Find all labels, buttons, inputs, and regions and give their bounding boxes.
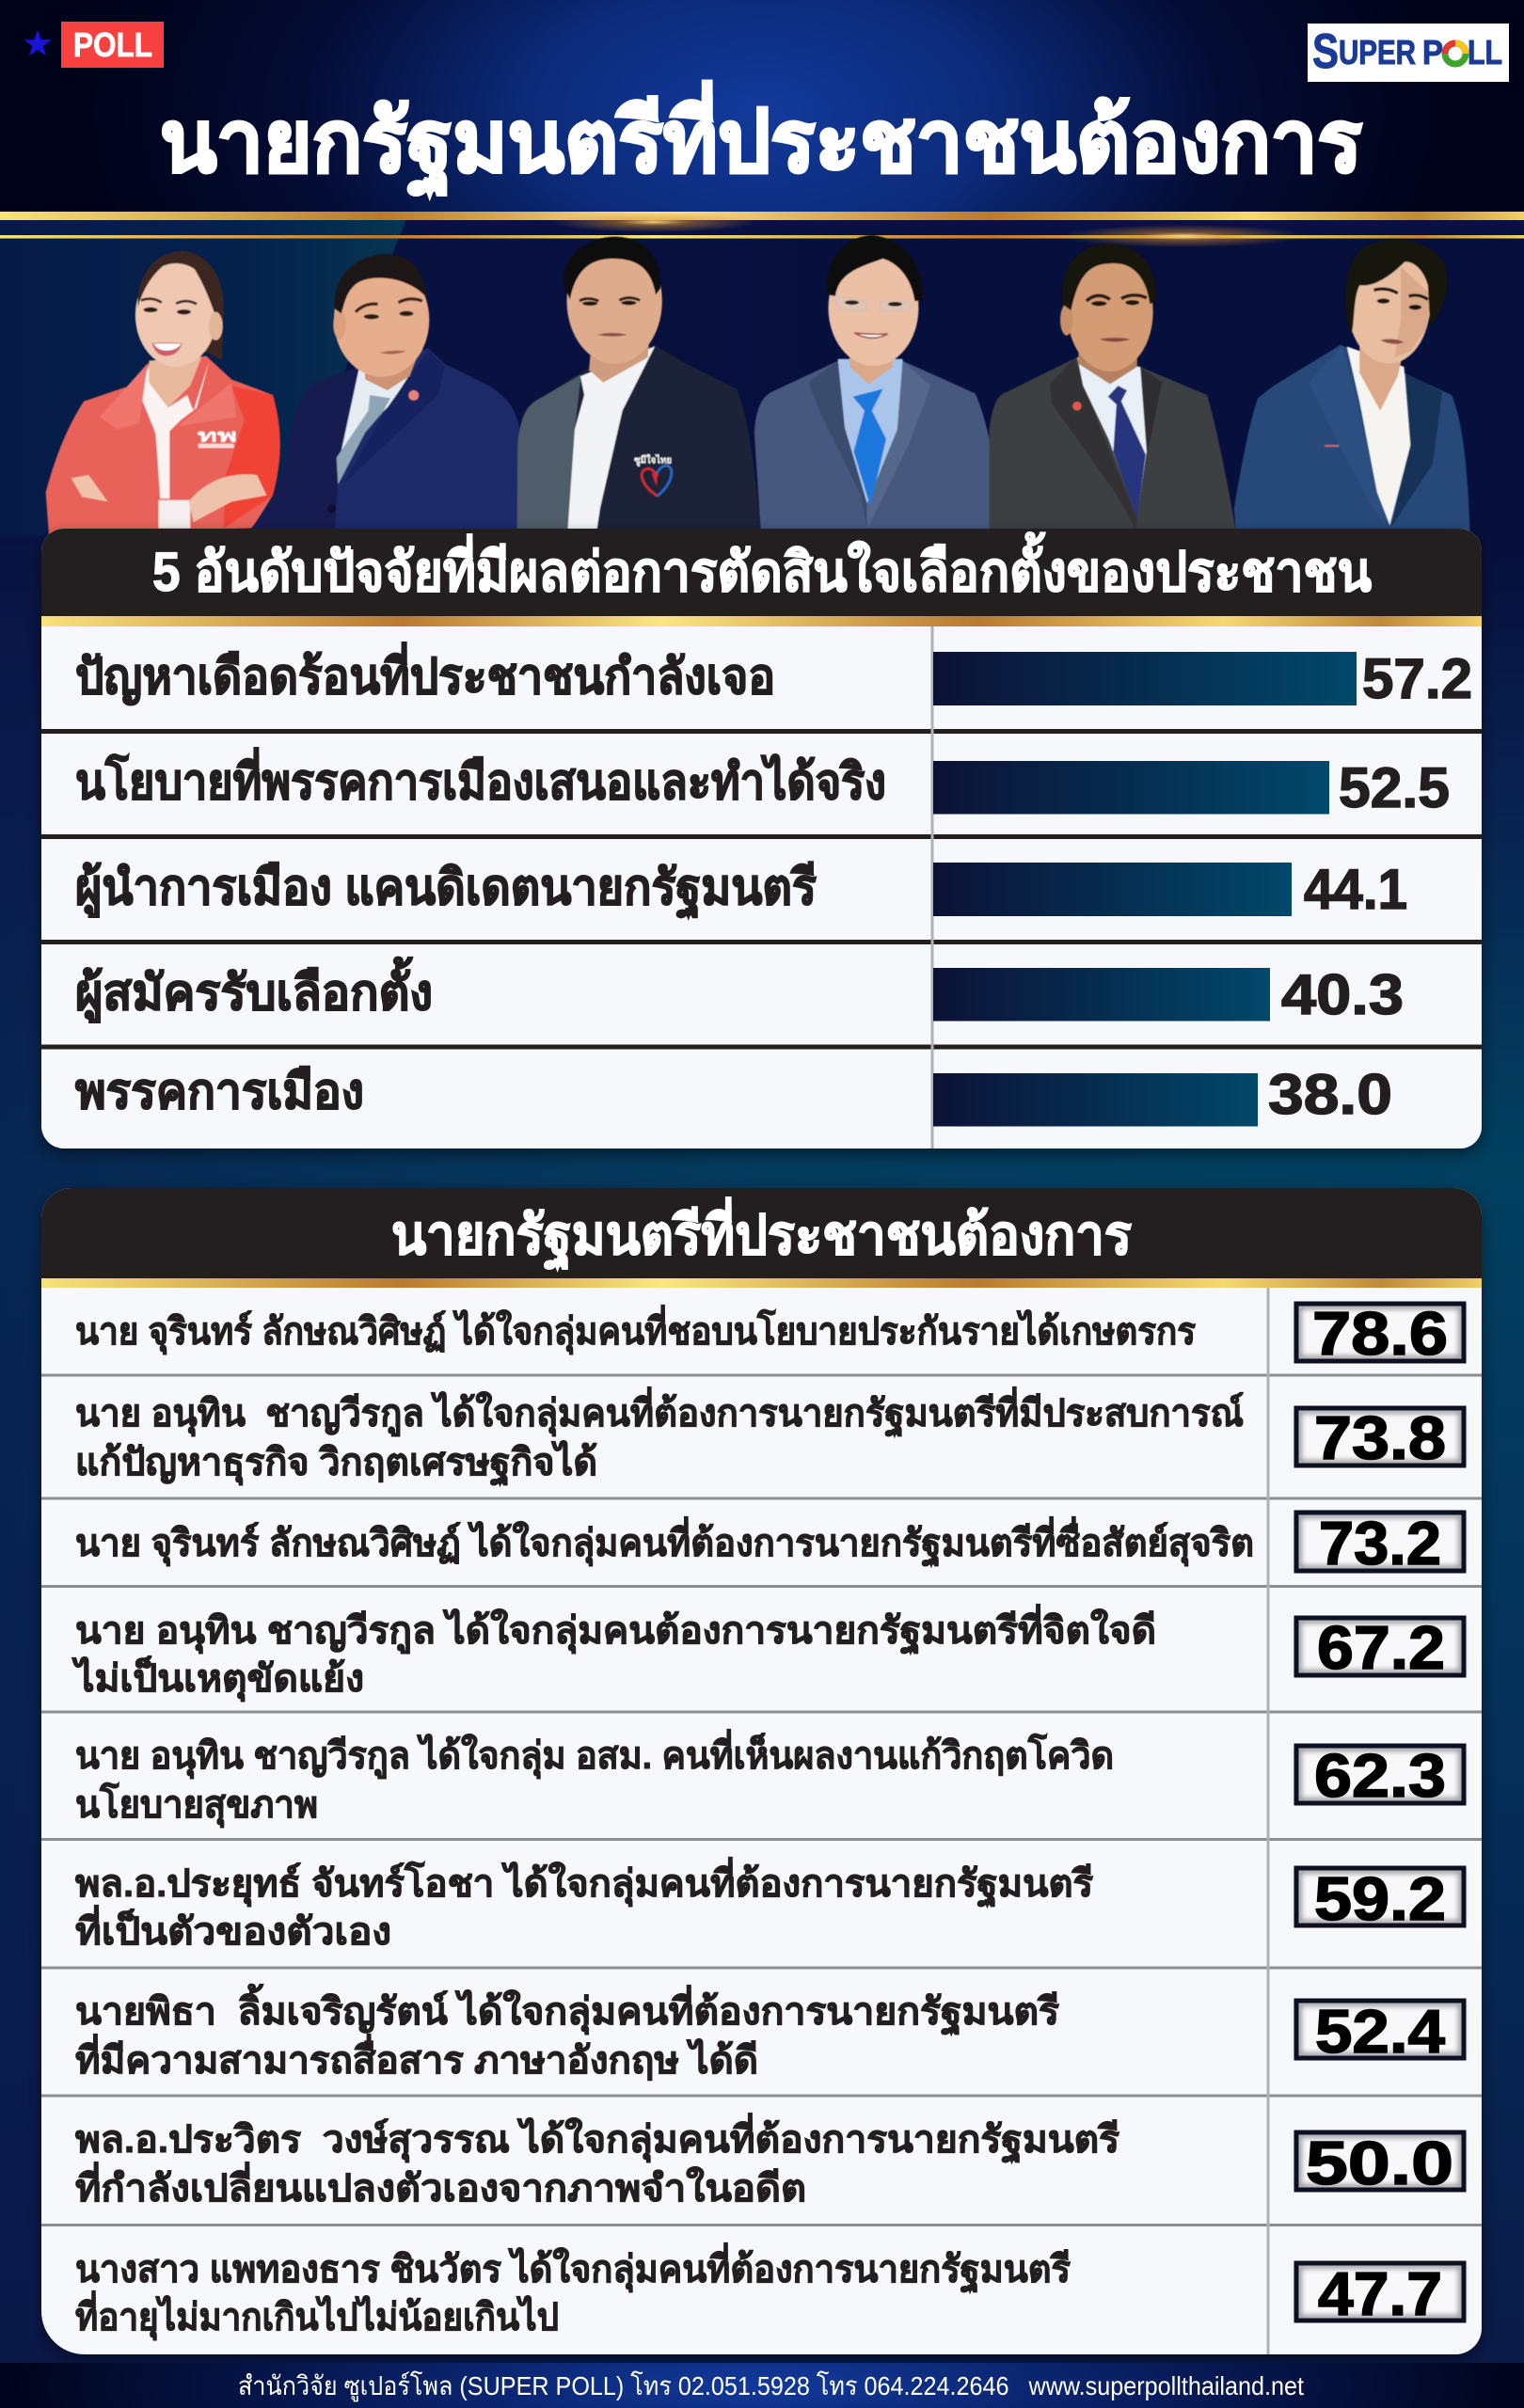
photo: man in dark jacket	[516, 237, 761, 530]
row: leaders 44.1: ผู้นำการเมือง แคนดิเดตนายกรัฐมนตรี	[75, 861, 817, 919]
photo: woman in red jacket	[46, 251, 280, 534]
row: policy 52.5	[75, 748, 1450, 819]
row: leaders 44.1: 44.1	[1304, 858, 1407, 921]
panel: desired prime minister	[41, 1188, 1482, 2354]
header band	[0, 0, 1524, 235]
logo: super poll: UPER	[1339, 33, 1416, 71]
row: 50.0: 50.0	[1306, 2129, 1453, 2197]
row: 62.3: นาย อนุทิน ชาญวีรกูล ได้ใจกลุ่ม อสม. คนที่เห็นผลงานแก้วิกฤตโควิด	[75, 1729, 1114, 1780]
row: 73.2	[75, 1509, 1464, 1577]
row: candidates 40.3: ผู้สมัครรับเลือกตั้ง	[75, 957, 433, 1023]
row: 52.4: 52.4	[1315, 1997, 1445, 2066]
row: 47.7: ที่อายุไม่มากเกินไปไม่น้อยเกินไป	[75, 2290, 559, 2341]
row: candidates 40.3	[75, 957, 1404, 1026]
panel: factors	[41, 529, 1482, 1149]
row: parties 38.0: พรรคการเมือง	[75, 1065, 364, 1119]
row: 50.0: ที่กำลังเปลี่ยนแปลงตัวเองจากภาพจำในอดีต	[75, 2162, 806, 2210]
photo: woman in red jacket: ทพ	[198, 425, 237, 445]
row: 78.6: นาย จุรินทร์ ลักษณวิศิษฏ์ ได้ใจกลุ่มคนที่ชอบนโยบายประกันรายได้เกษตรกร	[75, 1305, 1196, 1355]
row: 67.2: 67.2	[1317, 1613, 1445, 1682]
row: hot issues 57.2: ปัญหาเดือดร้อนที่ประชาชนกำลังเจอ	[75, 642, 775, 705]
panel header: desired prime minister	[41, 1188, 1482, 1288]
row: 62.3	[75, 1729, 1464, 1829]
row: 47.7: 47.7	[1318, 2259, 1442, 2328]
photo: man in navy suit with grey tie	[250, 254, 521, 530]
row: 67.2: นาย อนุทิน ชาญวีรกูล ได้ใจกลุ่มคนต้องการนายกรัฐมนตรีที่จิตใจดี	[75, 1604, 1156, 1656]
row: 52.4	[75, 1984, 1464, 2082]
photo: man in blue suit with glasses	[754, 235, 1007, 530]
row: leaders 44.1	[75, 858, 1407, 921]
logo: super poll: LL	[1468, 33, 1502, 71]
row: 73.8: แก้ปัญหาธุรกิจ วิกฤตเศรษฐกิจได้	[75, 1440, 597, 1487]
row: 67.2: ไม่เป็นเหตุขัดแย้ง	[71, 1655, 364, 1703]
row: 50.0	[75, 2113, 1464, 2210]
row: 73.8: 73.8	[1314, 1403, 1446, 1472]
row: parties 38.0	[75, 1063, 1392, 1127]
logo: super poll: P	[1422, 33, 1443, 71]
title: นายกรัฐมนตรีที่ประชาชนต้องการ	[160, 80, 1362, 198]
footer	[0, 2363, 1524, 2408]
row: 67.2	[71, 1604, 1464, 1703]
row: policy 52.5: นโยบายที่พรรคการเมืองเสนอและทำได้จริง	[75, 748, 886, 810]
logo: super poll	[1308, 24, 1509, 82]
row: 47.7	[75, 2242, 1464, 2341]
photo: man in grey suit	[990, 244, 1235, 530]
row: 62.3: 62.3	[1314, 1741, 1446, 1810]
row: 47.7: นางสาว แพทองธาร ชินวัตร ได้ใจกลุ่มคนที่ต้องการนายกรัฐมนตรี	[75, 2242, 1071, 2294]
gold divider lines	[0, 212, 1524, 247]
row: 62.3: นโยบายสุขภาพ	[75, 1782, 318, 1829]
row: hot issues 57.2: 57.2	[1362, 647, 1472, 710]
panel header: desired prime minister: นายกรัฐมนตรีที่ประชาชนต้องการ	[391, 1196, 1132, 1271]
logo: super poll: S	[1312, 24, 1339, 79]
row: 73.2: นาย จุรินทร์ ลักษณวิศิษฏ์ ได้ใจกลุ่มคนที่ต้องการนายกรัฐมนตรีที่ซื่อสัตย์สุจริต	[75, 1516, 1254, 1568]
photo: man in blue blazer with white shirt	[1234, 240, 1470, 534]
footer: สำนักวิจัย ซูเปอร์โพล (SUPER POLL) โทร 02.051.5928 โทร 064.224.2646 www.superpollthailand.net	[238, 2370, 1304, 2402]
photo: man in dark jacket: ซูมีใจไทย	[634, 452, 672, 467]
row: 59.2: พล.อ.ประยุทธ์ จันทร์โอชา ได้ใจกลุ่มคนที่ต้องการนายกรัฐมนตรี	[75, 1857, 1094, 1909]
row: 78.6	[75, 1299, 1464, 1368]
row: candidates 40.3: 40.3	[1281, 963, 1404, 1026]
row: 73.8	[75, 1386, 1464, 1487]
poll badge	[24, 22, 164, 68]
row: 78.6: 78.6	[1312, 1299, 1448, 1368]
row: 59.2: ที่เป็นตัวของตัวเอง	[75, 1905, 391, 1953]
row: parties 38.0: 38.0	[1268, 1063, 1392, 1126]
poll badge: POLL	[73, 25, 152, 64]
row: 52.4: นายพิธา ลิ้มเจริญรัตน์ ได้ใจกลุ่มคนที่ต้องการนายกรัฐมนตรี	[75, 1984, 1060, 2036]
row: 73.8: นาย อนุทิน ชาญวีรกูล ได้ใจกลุ่มคนที่ต้องการนายกรัฐมนตรีที่มีประสบการณ์	[75, 1386, 1244, 1438]
row: policy 52.5: 52.5	[1339, 756, 1450, 819]
panel header: factors: 5 อันดับปัจจัยที่มีผลต่อการตัดสินใจเลือกตั้งของประชาชน	[152, 532, 1372, 603]
row: 52.4: ที่มีความสามารถสื่อสาร ภาษาอังกฤษ ได้ดี	[75, 2034, 758, 2082]
row: 73.2: 73.2	[1319, 1509, 1441, 1577]
panel header: factors	[41, 529, 1482, 626]
row: 50.0: พล.อ.ประวิตร วงษ์สุวรรณ ได้ใจกลุ่มคนที่ต้องการนายกรัฐมนตรี	[75, 2113, 1120, 2164]
row: 59.2: 59.2	[1314, 1864, 1446, 1933]
row: hot issues 57.2	[75, 642, 1472, 710]
row: 59.2	[75, 1857, 1464, 1953]
